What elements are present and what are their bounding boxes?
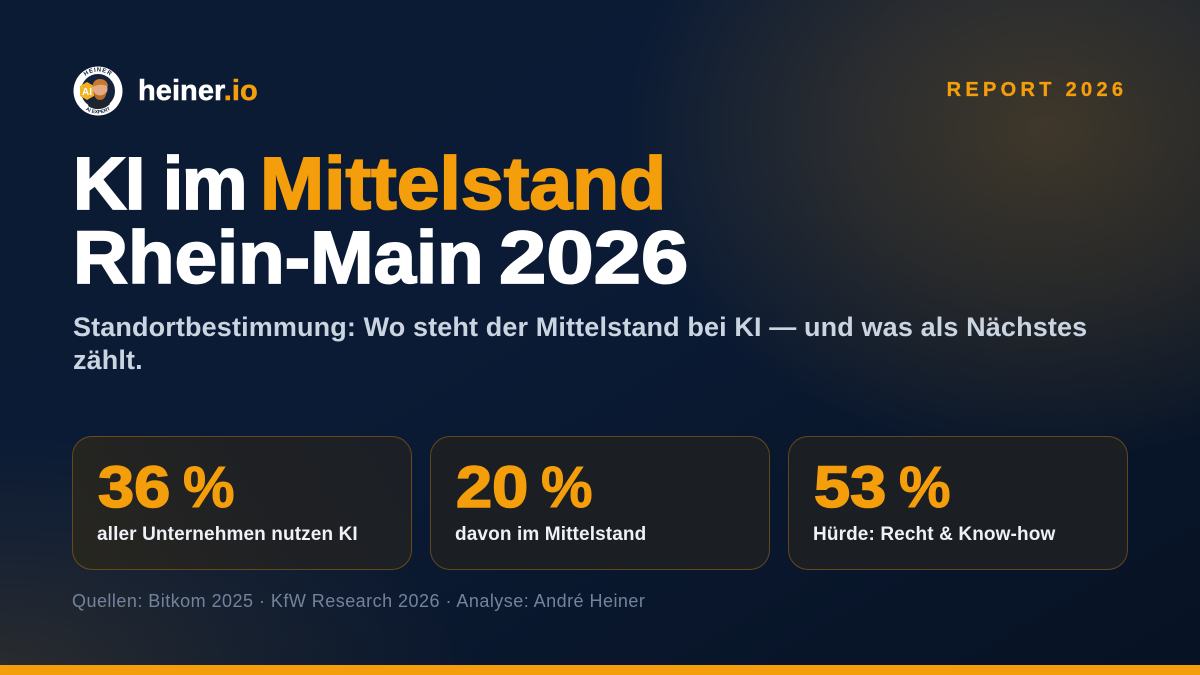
logo: round badge portrait: AI <box>82 87 92 98</box>
value <box>814 455 951 520</box>
caption: Hürde: Recht & Know-how <box>813 524 1055 545</box>
logo: round badge portrait: AI EXPERT <box>86 106 110 114</box>
caption: aller Unternehmen nutzen KI <box>97 524 358 545</box>
value: 36 <box>98 455 170 520</box>
logo: round badge portrait: HEINER <box>83 67 112 76</box>
title: 2026 <box>499 216 688 299</box>
subtitle <box>73 312 1087 375</box>
value <box>456 455 593 520</box>
value <box>98 455 235 520</box>
stat card: 53 % <box>788 436 1128 570</box>
sources: Quellen: Bitkom 2025 · KfW Research 2026 · Analyse: André Heiner <box>72 591 645 611</box>
report label: REPORT 2026 <box>947 79 1127 101</box>
brand name: heiner.io <box>138 75 258 107</box>
stat card: 20 % <box>430 436 770 570</box>
bottom accent bar <box>0 665 1200 675</box>
value: 53 <box>814 455 886 520</box>
logo: round badge portrait <box>74 66 122 116</box>
value: % <box>899 455 951 520</box>
title: KI im <box>73 142 246 225</box>
value: % <box>541 455 593 520</box>
stat card: 36 % <box>72 436 412 570</box>
caption: davon im Mittelstand <box>455 524 646 545</box>
value: % <box>183 455 235 520</box>
subtitle: zählt. <box>73 345 143 375</box>
title <box>73 142 688 299</box>
title: Rhein-Main <box>73 216 484 299</box>
subtitle: Standortbestimmung: Wo steht der Mittelstand bei KI — und was als Nächstes <box>73 312 1087 342</box>
value: 20 <box>456 455 528 520</box>
title: Mittelstand <box>260 142 666 225</box>
